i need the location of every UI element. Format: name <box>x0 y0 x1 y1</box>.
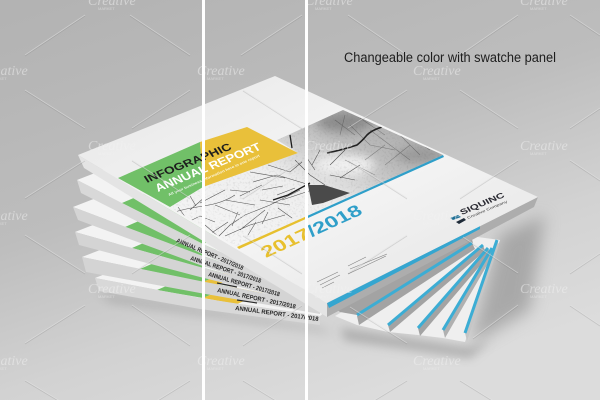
watermark row 5: Creative <box>88 282 136 297</box>
fan blue spines <box>357 240 497 333</box>
logo name: SIQUINC <box>458 191 507 217</box>
watermark row 2: Creative <box>197 64 245 79</box>
watermark row 3: Creative <box>88 139 136 154</box>
watermark row 5: Creative <box>520 282 568 297</box>
book stack: fanned right edges <box>327 232 500 342</box>
watermark row 4: Creative <box>413 209 461 224</box>
clipped dark text under yellow <box>217 283 257 303</box>
company logo <box>450 191 509 224</box>
watermark row 6: MARKET <box>423 366 440 371</box>
title line 1: INFOGRAPHIC <box>141 141 234 185</box>
top book cover <box>78 76 538 303</box>
book 3 left edge <box>73 172 340 304</box>
watermark row 1: MARKET <box>98 6 115 11</box>
watermark row 5: MARKET <box>315 294 332 299</box>
book 4 left edge <box>75 197 340 307</box>
watermark row 4: Creative <box>197 209 245 224</box>
watermark row 5 <box>88 282 568 299</box>
book 2 left edge <box>77 145 340 304</box>
cover year: 2017/2018 <box>257 202 366 261</box>
tree trunk <box>308 185 350 205</box>
contact text blocks <box>317 254 387 288</box>
watermark row 5: Creative <box>305 282 353 297</box>
watermark row 2: Creative <box>413 64 461 79</box>
watermark row 1 <box>88 0 568 11</box>
watermark row 5: MARKET <box>530 294 547 299</box>
divider bar left <box>202 0 205 400</box>
cover photo: bare trees <box>174 110 443 246</box>
spine label 4: ANNUAL REPORT - 2017/2018 <box>207 271 281 298</box>
watermark row 3: MARKET <box>315 151 332 156</box>
spine label 5: ANNUAL REPORT - 2017/2018 <box>217 287 297 311</box>
caption: Changeable color with swatche panel <box>344 50 556 65</box>
spine label 2: ANNUAL REPORT - 2017/2018 <box>175 237 245 272</box>
watermark row 2 <box>0 64 461 81</box>
watermark row 4: MARKET <box>423 221 440 226</box>
divider bar right <box>305 0 308 400</box>
photo cloud shading <box>315 112 444 175</box>
yellow title band <box>200 127 298 187</box>
watermark row 6 <box>0 354 461 371</box>
cover stripe blue <box>307 155 444 218</box>
watermark row 3: MARKET <box>530 151 547 156</box>
watermark row 4 <box>0 209 461 226</box>
logo mark <box>450 215 466 224</box>
watermark row 6: Creative <box>197 354 245 369</box>
watermark row 1: MARKET <box>315 6 332 11</box>
watermark row 3: Creative <box>305 139 353 154</box>
watermark row 6: Creative <box>413 354 461 369</box>
top book spine <box>78 155 327 317</box>
watermark row 2: MARKET <box>207 76 224 81</box>
logo tagline: Creative Company <box>466 199 509 220</box>
top book blue edge <box>327 226 480 308</box>
cover stripe yellow <box>237 216 308 249</box>
dark branch <box>327 127 382 153</box>
top book fore-edge <box>327 197 538 317</box>
watermark row 6: MARKET <box>207 366 224 371</box>
spine labels <box>175 237 319 323</box>
watermark row 5: MARKET <box>98 294 115 299</box>
fan pages <box>335 236 500 342</box>
title subtitle: All your business information here in one report <box>167 153 261 197</box>
book stack: fanned left spines <box>73 145 340 325</box>
watermark row 4: MARKET <box>207 221 224 226</box>
watermark row 3 <box>88 139 568 156</box>
spine label 6: ANNUAL REPORT - 2017/2018 <box>235 305 319 323</box>
watermark row 1: MARKET <box>530 6 547 11</box>
watermark row 3: MARKET <box>98 151 115 156</box>
green title band <box>118 142 203 207</box>
book 5 left edge <box>82 222 340 314</box>
top book <box>78 76 538 317</box>
cover title <box>141 140 264 197</box>
spine label 3: ANNUAL REPORT - 2017/2018 <box>189 255 262 285</box>
fan shadow bands <box>327 232 499 341</box>
stack shadow <box>98 215 545 358</box>
watermark row 3: Creative <box>520 139 568 154</box>
watermark row 2: MARKET <box>423 76 440 81</box>
title line 2: ANNUAL REPORT <box>152 140 264 194</box>
book 6 left edge <box>95 243 340 325</box>
